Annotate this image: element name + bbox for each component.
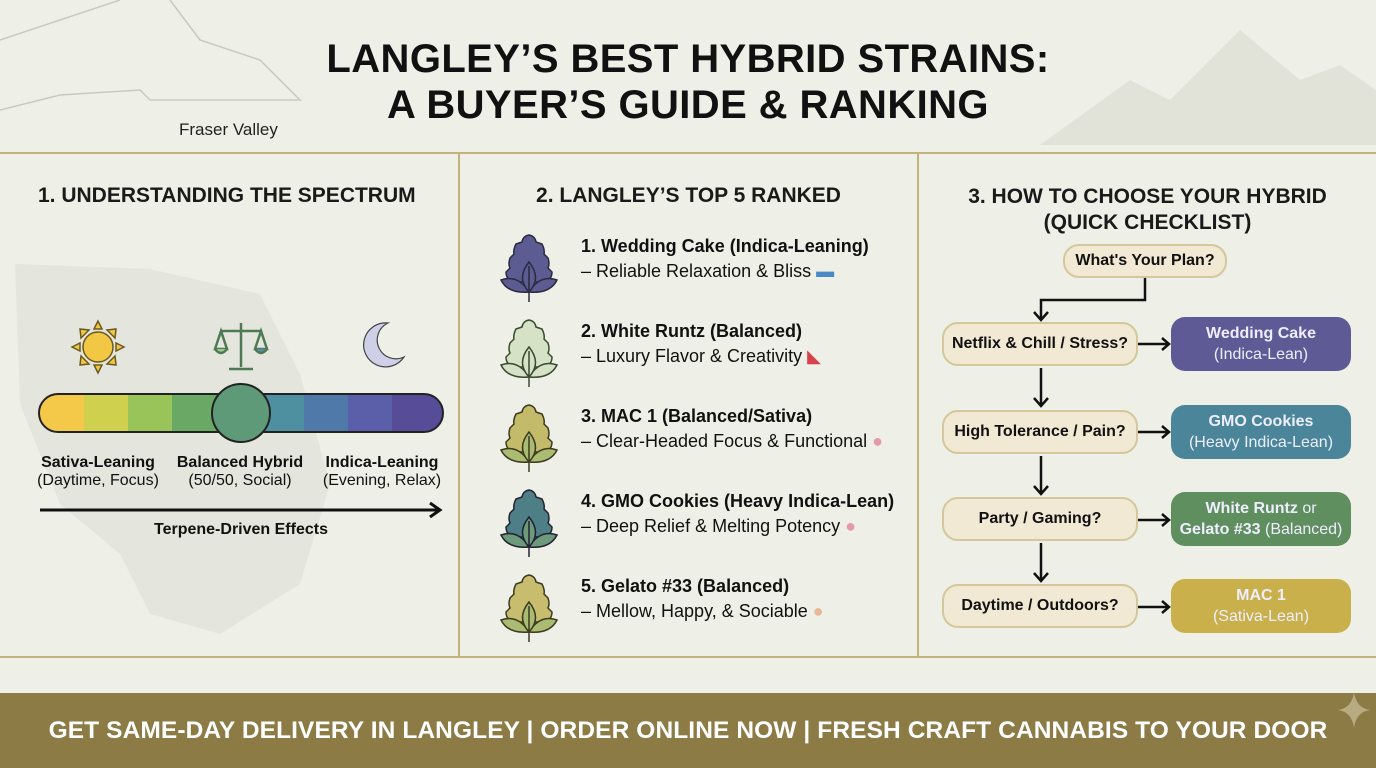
icon: bud teal [500,489,558,557]
box: what's your plan: What's Your Plan? [1075,252,1215,269]
label: indica: Indica-Leaning [326,454,438,471]
result: wedding cake: (Indica-Lean) [1214,346,1308,363]
label: sativa [37,454,159,489]
result: gmo: (Heavy Indica-Lean) [1189,434,1333,451]
box: what's your plan [1063,244,1227,278]
spectrum bar [38,383,444,443]
item 4 [500,489,894,557]
box: tolerance [942,410,1138,454]
box: party: Party / Gaming? [979,510,1101,527]
icon: sparkle [1338,692,1370,728]
item 2 [500,319,821,387]
item 5: 5. Gelato #33 (Balanced) [581,576,789,596]
result: mac 1: MAC 1 [1236,587,1286,604]
label: Fraser Valley: Fraser Valley [179,120,278,139]
item 3: 3. MAC 1 (Balanced/Sativa) [581,406,812,426]
result: gmo: GMO Cookies [1209,413,1313,430]
result: white runtz: Gelato #33 (Balanced) [1180,521,1342,538]
label: indica [323,454,441,489]
item 2: 2. White Runtz (Balanced) [581,321,802,341]
result: white runtz [1171,492,1351,546]
icon: bud yellow [500,574,558,642]
result: mac 1 [1171,579,1351,633]
result: mac 1: (Sativa-Lean) [1213,608,1309,625]
panel: spectrum [15,184,444,634]
item 5 [500,574,824,642]
label: indica: (Evening, Relax) [323,472,441,489]
result: wedding cake [1171,317,1351,371]
arrow: effects [40,502,442,518]
box: party [942,497,1138,541]
label: terpene: Terpene-Driven Effects [154,521,328,538]
icon: moon [363,322,406,368]
background map outline top-left [0,0,302,111]
item 1 [500,234,869,302]
panel: checklist [968,185,1327,234]
icon: bud light green [500,319,558,387]
heading: 3. HOW TO CHOOSE YOUR HYBRID [968,185,1327,208]
footer banner: GET SAME-DAY DELIVERY IN LANGLEY | ORDER ONLINE NOW | FRESH CRAFT CANNABIS TO YOUR DOOR [49,716,1327,744]
heading: (QUICK CHECKLIST) [1044,211,1251,234]
result: wedding cake: Wedding Cake [1206,325,1316,342]
result: white runtz: White Runtz or [1205,500,1317,517]
item 2: – Luxury Flavor & Creativity ◣ [581,346,821,366]
result: gmo [1171,405,1351,459]
title: A BUYER’S GUIDE & RANKING [387,83,989,127]
box: daytime [942,584,1138,628]
item 4: 4. GMO Cookies (Heavy Indica-Lean) [581,491,894,511]
box: netflix: Netflix & Chill / Stress? [952,335,1128,352]
icon: bud purple [500,234,558,302]
heading: 2. LANGLEY’S TOP 5 RANKED [536,184,841,207]
box: tolerance: High Tolerance / Pain? [954,423,1126,440]
label: balanced: Balanced Hybrid [177,454,303,471]
box: daytime: Daytime / Outdoors? [961,597,1119,614]
title [326,37,1050,127]
title: LANGLEY’S BEST HYBRID STRAINS: [326,37,1050,81]
heading: 1. UNDERSTANDING THE SPECTRUM [38,184,416,207]
decorative mountains [1040,30,1376,145]
background map [15,264,330,634]
label: sativa: (Daytime, Focus) [37,472,159,489]
item 1: 1. Wedding Cake (Indica-Leaning) [581,236,869,256]
flow arrows [1033,278,1171,614]
item 5: – Mellow, Happy, & Sociable ● [581,601,824,621]
icon: scales [213,323,269,370]
item 4: – Deep Relief & Melting Potency ● [581,516,856,536]
footer banner [0,693,1376,768]
icon: bud olive [500,404,558,472]
heading [968,185,1327,234]
item 1: – Reliable Relaxation & Bliss ▬ [581,261,834,281]
box: netflix [942,322,1138,366]
label: sativa: Sativa-Leaning [41,454,155,471]
icon: sun [70,320,126,374]
label: balanced [177,454,303,489]
item 3 [500,404,883,472]
label: balanced: (50/50, Social) [188,472,292,489]
item 3: – Clear-Headed Focus & Functional ● [581,431,883,451]
